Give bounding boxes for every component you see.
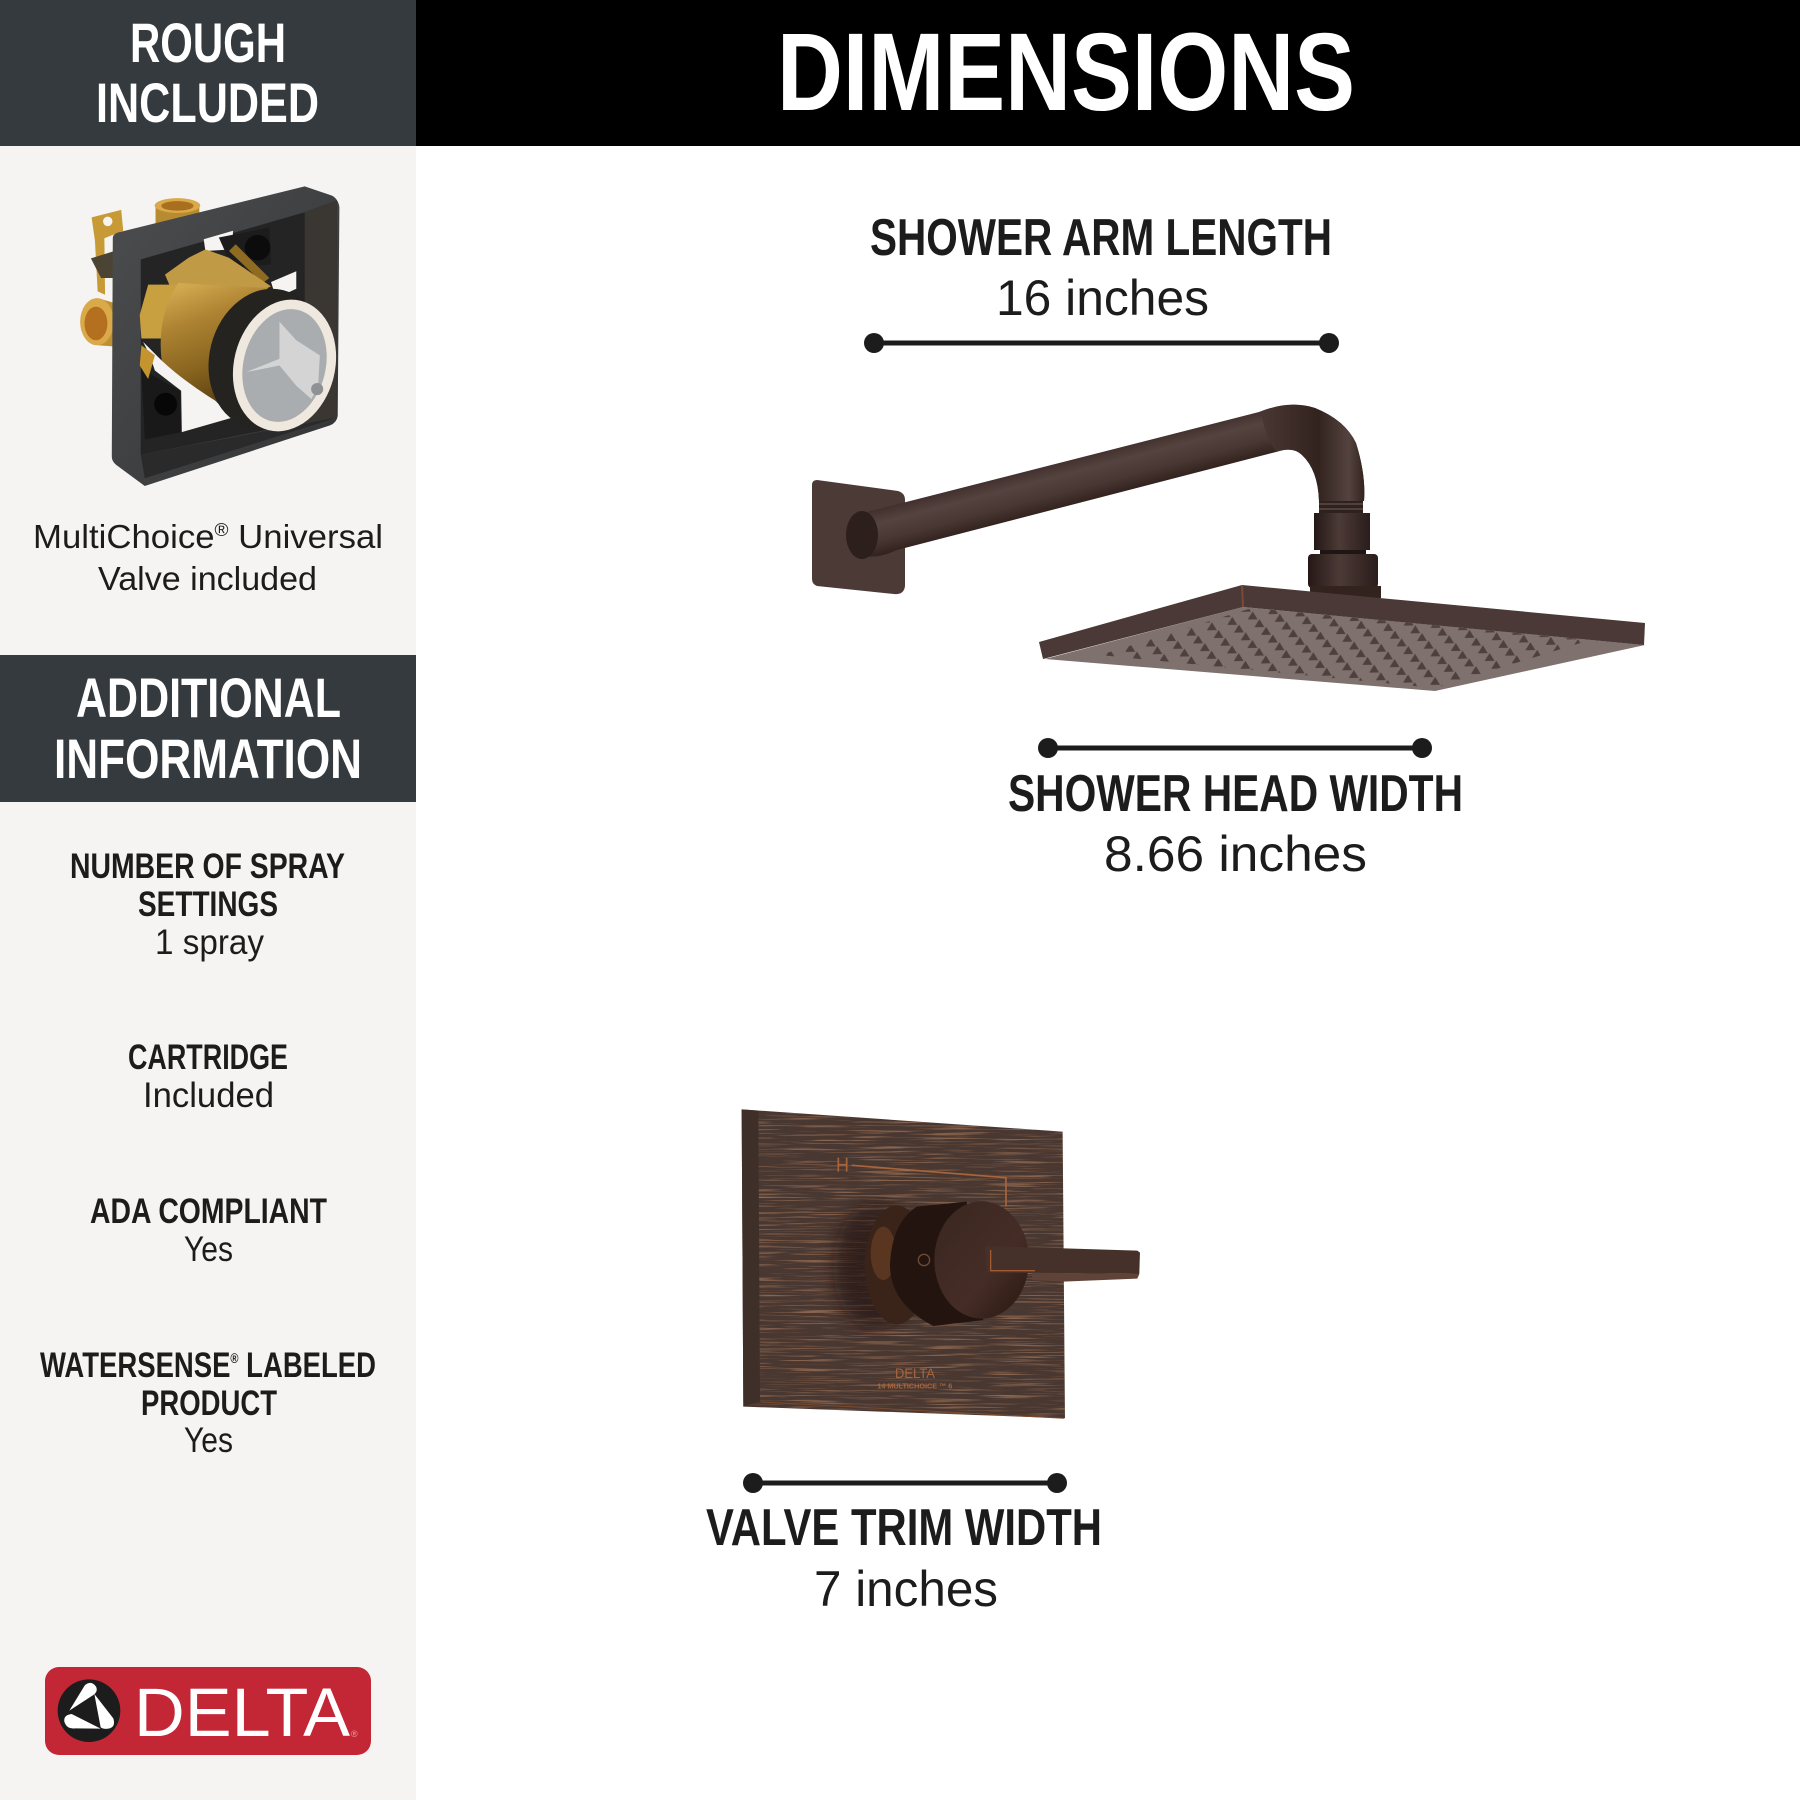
dimension: valve trim width: 7 inches (814, 1561, 998, 1617)
heading: additional information: ADDITIONAL (76, 666, 341, 729)
plate engraving (877, 1365, 952, 1391)
caption: valve: MultiChoice (33, 518, 205, 555)
head nozzles (1100, 608, 1590, 688)
heading: additional information: INFORMATION (54, 727, 362, 790)
spec: watersense: LABELED (239, 1346, 376, 1385)
header band: dimensions (416, 0, 1800, 146)
plastic frame (112, 186, 339, 486)
caption: valve: Universal (229, 518, 383, 555)
spec: watersense: WATERSENSE (40, 1346, 282, 1385)
spec: ada compliant: ADA COMPLIANT (90, 1192, 327, 1231)
arm base (846, 511, 878, 559)
heading: rough included: ROUGH (130, 11, 286, 74)
spec: spray settings: SETTINGS (138, 885, 278, 924)
spec: cartridge: Included (143, 1076, 274, 1115)
title: DIMENSIONS (777, 11, 1355, 134)
spec: watersense: ® (230, 1350, 239, 1366)
spec: cartridge: CARTRIDGE (128, 1038, 288, 1077)
illustration: rough-in valve (80, 186, 350, 486)
brass valve body (140, 244, 271, 411)
illustration: shower arm and head (812, 405, 1645, 691)
threaded connector (1308, 501, 1381, 598)
end cap (194, 276, 350, 442)
top brass outlet (155, 198, 200, 227)
logo mark (58, 1679, 120, 1742)
head rim (1039, 585, 1645, 659)
lever handle (985, 1246, 1140, 1282)
spec: spray settings (70, 847, 345, 962)
dimension: shower arm length (864, 209, 1339, 353)
dimension: shower arm length: 16 inches (996, 270, 1209, 326)
spec: spray settings: NUMBER OF SPRAY (70, 847, 345, 886)
mounting screws (141, 227, 271, 440)
spec: ada compliant: Yes (184, 1230, 233, 1269)
header band: rough included (0, 0, 416, 146)
spec: watersense (40, 1346, 376, 1460)
wall flange (812, 480, 905, 594)
logo: delta (45, 1667, 371, 1755)
brass mounting tab (92, 210, 123, 295)
spec: watersense: Yes (184, 1421, 233, 1460)
illustration: valve trim (742, 1109, 1140, 1418)
header band: additional information (0, 655, 416, 802)
caption: valve: ® (215, 520, 229, 540)
spec: cartridge (128, 1038, 288, 1115)
caption: valve: Valve included (98, 560, 317, 597)
spec: spray settings: 1 spray (155, 923, 264, 962)
dimension: valve trim width: VALVE TRIM WIDTH (706, 1499, 1102, 1557)
dimension: valve trim width (706, 1473, 1102, 1617)
dimension: shower head width: 8.66 inches (1104, 826, 1367, 882)
temperature mark (838, 1158, 1006, 1207)
dimension: shower arm length: SHOWER ARM LENGTH (870, 209, 1332, 267)
shower arm (855, 405, 1364, 557)
plate engraving: 14 MULTICHOICE ™ 6 (877, 1382, 952, 1391)
panel: sidebar background (0, 0, 416, 1800)
heading: rough included (96, 11, 319, 134)
trim plate (742, 1109, 1065, 1418)
logo wordmark: DELTA (134, 1674, 350, 1751)
dimension: shower head width (1008, 738, 1463, 882)
knob shadow and body (833, 1201, 1029, 1330)
left brass outlet (80, 298, 145, 349)
spec: watersense: PRODUCT (141, 1384, 277, 1423)
caption: valve (33, 518, 383, 597)
arm bend (1262, 405, 1364, 501)
heading: additional information (54, 666, 362, 790)
heading: rough included: INCLUDED (96, 71, 319, 134)
logo registered mark: ® (351, 1729, 358, 1739)
dimension: shower head width: SHOWER HEAD WIDTH (1008, 765, 1463, 823)
head underside (1045, 607, 1645, 691)
plate engraving: DELTA (895, 1365, 936, 1381)
spec: ada compliant (90, 1192, 327, 1269)
